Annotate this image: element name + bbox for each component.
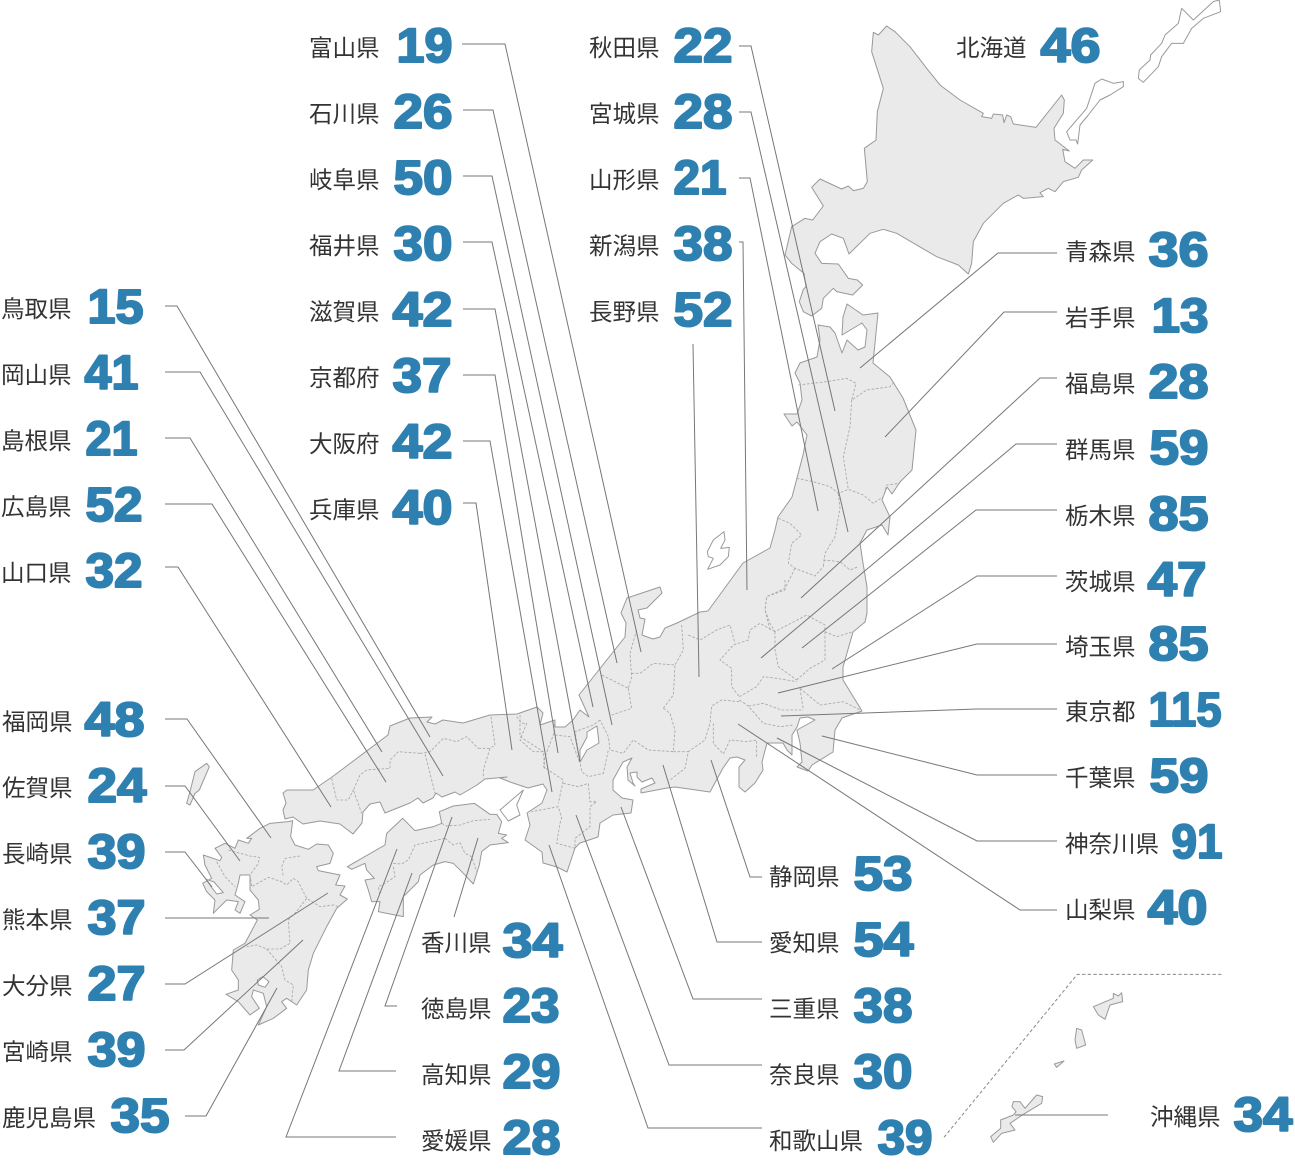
label: Hokkaido: 北海道 <box>956 35 1026 61</box>
Gunma: 群馬県 <box>1065 437 1136 463</box>
Osaka: 42 <box>392 416 452 469</box>
Tochigi: 85 <box>1148 488 1208 541</box>
map: Kyushu <box>187 763 347 1025</box>
Miyazaki: 39 <box>88 1024 146 1077</box>
map: Lake Biwa <box>580 726 599 762</box>
Shiga: 42 <box>392 284 452 337</box>
label: Okinawa: 沖縄県 <box>1150 1104 1220 1130</box>
Aomori <box>1065 224 1208 277</box>
Ibaraki <box>1065 554 1206 607</box>
Ishikawa: 石川県 <box>309 101 380 127</box>
label: Okinawa: 34 <box>1234 1089 1293 1142</box>
Kagawa: 香川県 <box>421 930 492 956</box>
Ehime <box>421 1112 560 1165</box>
map: Kanto and Chubu borders <box>520 580 862 848</box>
Tottori: 15 <box>88 281 144 334</box>
Shimane <box>1 413 138 466</box>
Hyogo: 40 <box>392 482 452 535</box>
Shiga <box>309 284 452 337</box>
Tokushima <box>421 980 560 1033</box>
Yamaguchi: 山口県 <box>1 560 72 586</box>
Yamaguchi: 32 <box>86 545 142 598</box>
Okayama: 岡山県 <box>1 362 72 388</box>
Iwate: 岩手県 <box>1065 305 1136 331</box>
Tottori: 鳥取県 <box>1 296 72 322</box>
Nagano: 52 <box>674 284 732 337</box>
label: Hokkaido <box>956 20 1100 73</box>
Shimane: 21 <box>86 413 138 466</box>
label: Okinawa <box>1150 1089 1293 1142</box>
Kagawa: 34 <box>502 915 563 968</box>
Tokyo: 115 <box>1148 684 1222 737</box>
Aichi <box>769 914 914 967</box>
Yamanashi <box>1065 882 1208 935</box>
Niigata <box>589 218 732 271</box>
Tochigi <box>1065 488 1208 541</box>
Toyama <box>309 20 452 73</box>
Tokyo <box>1065 684 1222 737</box>
map: Hokkaido <box>785 26 1093 316</box>
Niigata: 新潟県 <box>589 233 660 259</box>
Nagasaki: 39 <box>88 826 146 879</box>
Mie <box>769 980 912 1033</box>
Fukui: 30 <box>394 218 452 271</box>
Tokushima: 23 <box>502 980 560 1033</box>
Miyazaki: 宮崎県 <box>2 1039 72 1065</box>
Niigata: 38 <box>674 218 732 271</box>
labels: Tohoku and Shinetsu column <box>589 20 732 337</box>
Iwate: 13 <box>1152 290 1208 343</box>
Ishikawa: 26 <box>394 86 452 139</box>
Mie: 38 <box>854 980 912 1033</box>
Ishikawa <box>309 86 452 139</box>
Fukui <box>309 218 452 271</box>
Fukushima: 福島県 <box>1065 371 1136 397</box>
Nara <box>769 1046 912 1099</box>
Kagoshima <box>2 1090 170 1143</box>
labels: eastern column <box>1065 224 1222 935</box>
Saga: 24 <box>88 760 147 813</box>
Kumamoto <box>2 892 146 945</box>
Yamanashi: 40 <box>1148 882 1208 935</box>
labels: Chubu and Kansai column <box>309 20 452 535</box>
Gunma <box>1065 422 1208 475</box>
Kochi: 29 <box>502 1046 560 1099</box>
Shiga: 滋賀県 <box>309 299 380 325</box>
Toyama: 富山県 <box>309 35 380 61</box>
Yamanashi: 山梨県 <box>1065 897 1136 923</box>
Kanagawa: 91 <box>1172 816 1222 869</box>
Hiroshima <box>1 479 142 532</box>
Tokyo: 東京都 <box>1065 699 1136 725</box>
Kyoto: 37 <box>392 350 452 403</box>
Aomori: 36 <box>1148 224 1208 277</box>
Kanagawa <box>1065 816 1222 869</box>
Yamagata <box>589 152 726 205</box>
Osaka <box>309 416 452 469</box>
Shimane: 島根県 <box>1 428 72 454</box>
Akita: 22 <box>674 20 732 73</box>
Aichi: 54 <box>854 914 914 967</box>
Nagano: 長野県 <box>589 299 660 325</box>
Kochi <box>421 1046 560 1099</box>
Oita: 27 <box>88 958 146 1011</box>
Osaka: 大阪府 <box>309 431 380 457</box>
map: Awaji island <box>500 790 523 821</box>
Yamagata: 21 <box>674 152 726 205</box>
Okayama <box>1 347 138 400</box>
Aomori: 青森県 <box>1065 239 1136 265</box>
labels: Shikoku column <box>421 915 563 1165</box>
Wakayama <box>769 1112 932 1165</box>
Chiba: 千葉県 <box>1065 765 1136 791</box>
Tokushima: 徳島県 <box>421 996 492 1022</box>
Hyogo <box>309 482 452 535</box>
map: Chugoku borders <box>332 717 545 813</box>
labels: Kyushu column <box>2 694 170 1143</box>
leader lines <box>165 44 1108 1137</box>
map: Tohoku prefecture borders <box>765 378 900 630</box>
Miyagi: 28 <box>674 86 732 139</box>
Saga: 佐賀県 <box>2 775 72 801</box>
Fukuoka <box>2 694 144 747</box>
Saitama: 85 <box>1148 618 1208 671</box>
Hyogo: 兵庫県 <box>309 497 380 523</box>
Akita <box>589 20 732 73</box>
Gifu: 50 <box>394 152 452 205</box>
Wakayama: 和歌山県 <box>769 1128 863 1154</box>
Fukui: 福井県 <box>309 233 380 259</box>
Hiroshima: 52 <box>86 479 142 532</box>
Wakayama: 39 <box>878 1112 932 1165</box>
Yamaguchi <box>1 545 142 598</box>
Kumamoto: 37 <box>88 892 146 945</box>
labels: Chugoku column <box>1 281 144 598</box>
label: Hokkaido: 46 <box>1040 20 1100 73</box>
Kagoshima: 35 <box>110 1090 170 1143</box>
Ibaraki: 茨城県 <box>1065 569 1136 595</box>
Gunma: 59 <box>1150 422 1208 475</box>
Yamagata: 山形県 <box>589 167 660 193</box>
Shizuoka: 静岡県 <box>769 864 840 890</box>
Okayama: 41 <box>84 347 138 400</box>
Gifu <box>309 152 452 205</box>
Kagawa <box>421 915 563 968</box>
map: Shikoku <box>347 803 508 917</box>
Iwate <box>1065 290 1208 343</box>
Nara: 奈良県 <box>769 1062 840 1088</box>
Nagasaki: 長崎県 <box>2 841 72 867</box>
map: Honshu <box>283 304 916 872</box>
Oita <box>2 958 146 1011</box>
Akita: 秋田県 <box>589 35 660 61</box>
Gifu: 岐阜県 <box>309 167 380 193</box>
Mie: 三重県 <box>769 996 840 1022</box>
Nara: 30 <box>854 1046 912 1099</box>
Miyagi: 宮城県 <box>589 101 660 127</box>
Saitama <box>1065 618 1208 671</box>
Ibaraki: 47 <box>1148 554 1206 607</box>
Fukuoka: 福岡県 <box>2 709 72 735</box>
Miyagi <box>589 86 732 139</box>
Saitama: 埼玉県 <box>1065 634 1136 660</box>
Kyoto: 京都府 <box>309 365 380 391</box>
Aichi: 愛知県 <box>769 930 840 956</box>
Hiroshima: 広島県 <box>1 494 72 520</box>
Fukushima <box>1065 356 1208 409</box>
Fukuoka: 48 <box>84 694 144 747</box>
labels: Tokai and Kinki column <box>769 848 932 1165</box>
Saga <box>2 760 147 813</box>
Kochi: 高知県 <box>421 1062 492 1088</box>
Kumamoto: 熊本県 <box>2 907 72 933</box>
Fukushima: 28 <box>1148 356 1208 409</box>
map: Okinawa inset <box>944 974 1222 1142</box>
Shizuoka: 53 <box>854 848 912 901</box>
Ehime: 28 <box>502 1112 560 1165</box>
Tottori <box>1 281 144 334</box>
Kyoto <box>309 350 452 403</box>
Chiba: 59 <box>1150 750 1208 803</box>
Chiba <box>1065 750 1208 803</box>
Miyazaki <box>2 1024 146 1077</box>
Kanagawa: 神奈川県 <box>1065 831 1159 857</box>
Ehime: 愛媛県 <box>421 1128 492 1154</box>
Shizuoka <box>769 848 912 901</box>
map: northern islands <box>1067 0 1221 144</box>
Nagasaki <box>2 826 146 879</box>
Toyama: 19 <box>396 20 452 73</box>
Tochigi: 栃木県 <box>1065 503 1136 529</box>
Oita: 大分県 <box>2 973 72 999</box>
Kagoshima: 鹿児島県 <box>2 1105 96 1131</box>
map: Sado island <box>707 532 729 569</box>
Nagano <box>589 284 732 337</box>
